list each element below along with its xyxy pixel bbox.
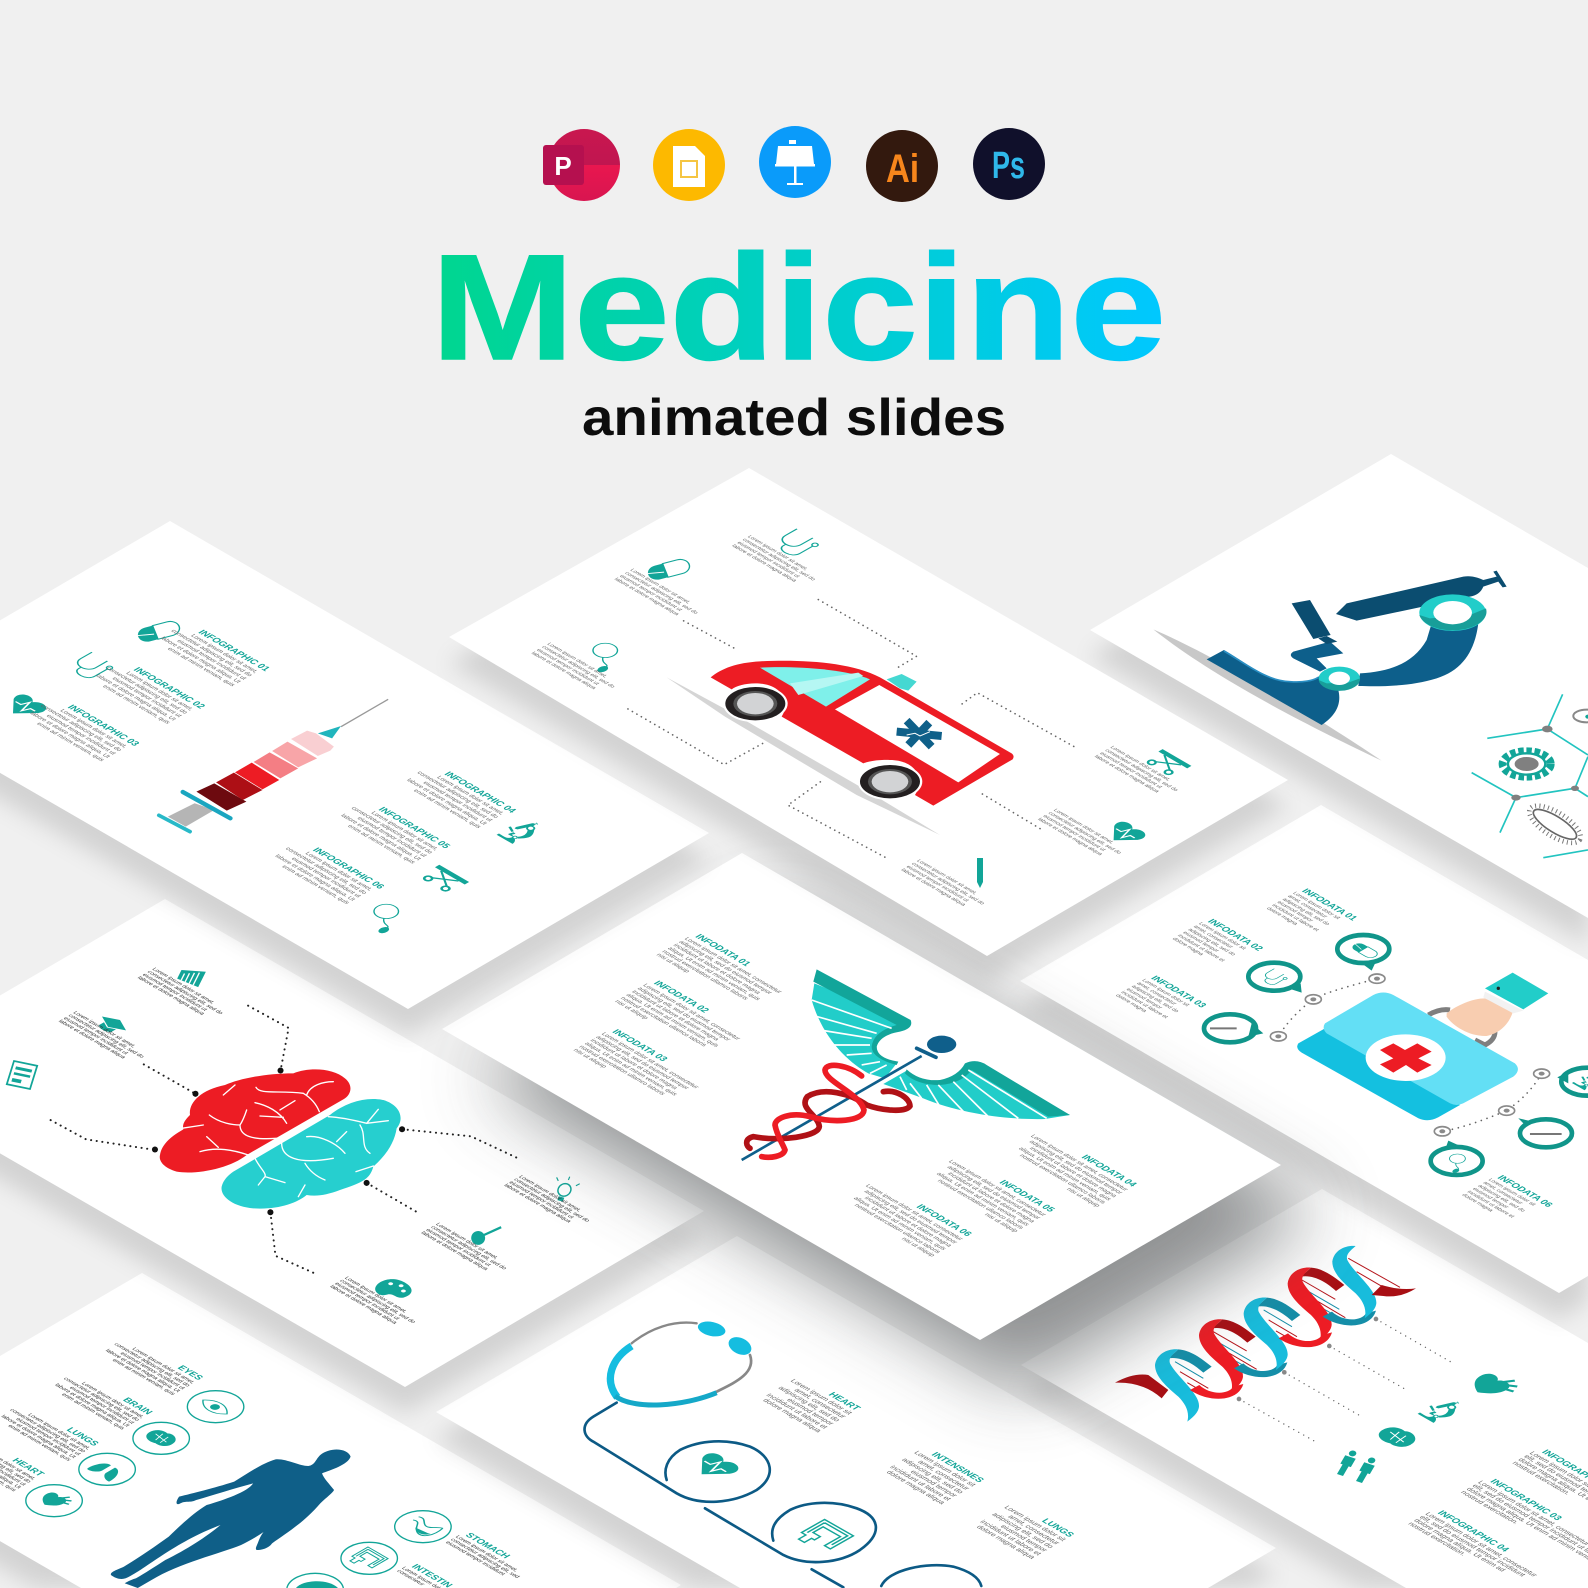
body part text <box>0 1334 535 1588</box>
stethoscope slide text: incididunt ut labore et <box>978 1519 1043 1557</box>
stethoscope slide text: Lorem ipsum dolor sit <box>1002 1505 1068 1542</box>
DNA slide text: elit, sed do eiusmod tempor incididunt <box>1417 1514 1527 1578</box>
ambulance slide text <box>529 535 1184 912</box>
DNA slide text: nostrud exercitation. <box>1459 1490 1521 1525</box>
medical bag slide text: eiusmod tempor <box>1275 900 1314 923</box>
body part text: EYES <box>175 1364 205 1381</box>
dotted nodes <box>1270 974 1550 1136</box>
syringe slide text: INFOGRAPHIC 05 <box>376 806 453 850</box>
body part text: enim ad minim veniam, quis <box>6 1424 72 1462</box>
caduceus slide text: adipiscing elit, sed do eiusmod tempor <box>945 1165 1042 1221</box>
ambulance slide text: Lorem ipsum dolor sit amet, <box>915 859 979 896</box>
ambulance slide text: eiusmod tempor incididunt ut <box>1041 814 1107 852</box>
syringe slide text: Lorem ipsum dolor sit amet, <box>124 671 194 712</box>
brain slide text: Lorem ipsum dolor sit amet, <box>71 1011 137 1049</box>
caduceus slide text: INFODATA 05 <box>997 1179 1057 1213</box>
ambulance slide text: Lorem ipsum dolor sit amet, <box>545 642 609 679</box>
caduceus slide text: incididunt ut labore et dolore magna <box>945 1171 1037 1224</box>
title: Medicine <box>431 223 1166 391</box>
syringe slide icons <box>0 619 538 934</box>
stethoscope slide text: eiusmod tempor <box>785 1397 836 1427</box>
syringe slide text: eiusmod tempor incididunt ut <box>110 677 183 718</box>
caduceus slide text: aliqua. Ut enim ad minim veniam, quis <box>583 1041 679 1097</box>
syringe slide text: INFOGRAPHIC 06 <box>310 846 387 890</box>
body part text: Lorem ipsum dolor sit amet, <box>130 1347 196 1385</box>
syringe slide text: labore et dolore magna aliqua. Ut <box>273 854 356 902</box>
body part text: labore et dolore magna aliqua. Ut <box>103 1349 181 1394</box>
panel: stethoscope slide <box>436 1236 1276 1588</box>
pin icons <box>1210 942 1588 1174</box>
body part text: consectetur <box>395 1569 426 1587</box>
caduceus slide text: adipiscing elit, sed do eiusmod tempor <box>862 1189 959 1245</box>
icon: Photoshop <box>973 128 1045 200</box>
syringe slide text: enim ad minim veniam, quis <box>411 789 482 829</box>
ambulance slide text: labore et dolore magna aliqua <box>1036 817 1104 857</box>
panel: human body slide <box>0 1273 681 1588</box>
panel: ambulance slide <box>449 468 1288 982</box>
medical bag slide text: eiusmod tempor <box>1181 931 1220 953</box>
stethoscope slide text: incididunt ut labore et <box>888 1464 953 1502</box>
brain slide text: eiusmod tempor incididunt ut <box>507 1180 575 1220</box>
caduceus slide text: nisi ut aliquip <box>983 1212 1020 1234</box>
stethoscope slide text: adipiscing elit, sed do <box>776 1385 842 1423</box>
syringe slide text: eiusmod tempor incididunt ut <box>175 639 247 681</box>
caduceus slide text: incididunt ut labore et dolore magna <box>630 989 721 1042</box>
caduceus slide text: Lorem ipsum dolor sit amet, consectetur <box>682 936 783 995</box>
stethoscope slide text: dolore magna aliqua <box>884 1469 947 1505</box>
medical bag slide text: dolore magna <box>1114 994 1149 1014</box>
stethoscope slide text: amet, consectetur <box>916 1459 972 1492</box>
ambulance slide text: consectetur adipiscing elit, sed do <box>1103 748 1179 792</box>
panel: syringe slide <box>0 521 709 1035</box>
brain <box>160 1069 401 1209</box>
brain slide text: consectetur adipiscing elit, sed do <box>429 1225 508 1271</box>
syringe slide text: Lorem ipsum dolor sit amet, <box>189 634 259 674</box>
medical bag slide text: eiusmod tempor <box>1471 1187 1510 1210</box>
DNA slide text: nostrud exercitation. <box>1510 1460 1572 1496</box>
body part text: Lorem ipsum dolor sit amet, <box>453 1535 519 1573</box>
brain slide text: labore et dolore magna aliqua <box>502 1183 573 1224</box>
ambulance slide text: labore et dolore magna aliqua <box>730 544 798 583</box>
caduceus <box>742 969 1070 1160</box>
icon: heart with gauge <box>687 1451 742 1483</box>
medical bag slide text: Lorem ipsum dolor sit <box>1197 922 1247 951</box>
body part text: eiusmod tempor incididunt ut <box>14 1417 82 1457</box>
ambulance slide text: eiusmod tempor incididunt ut <box>535 648 601 686</box>
caduceus slide text: aliqua. Ut enim ad minim veniam, quis <box>666 946 762 1002</box>
medical bag slide text: incididunt ut labore et <box>1176 934 1226 963</box>
brain slide text: consectetur adipiscing elit, sed do <box>66 1014 145 1059</box>
icon: Photoshop: Ps <box>992 145 1025 187</box>
stethoscope slide text: INTENSINES <box>929 1451 986 1484</box>
brain slide text: consectetur adipiscing elit, sed do <box>512 1178 591 1223</box>
medical bag slide text: adipiscing elit, sed do <box>1476 1184 1526 1213</box>
caduceus slide text: adipiscing elit, sed do eiusmod tempor <box>594 1035 691 1091</box>
stethoscope slide text: dolore magna aliqua <box>761 1397 823 1434</box>
brain slide text: labore et dolore magna aliqua <box>328 1285 399 1325</box>
body part text: consectetur adipiscing elit, sed <box>449 1538 520 1579</box>
brain slide text <box>56 967 596 1330</box>
syringe slide text: enim ad minim veniam, quis <box>101 684 171 725</box>
stethoscope slide text: Lorem ipsum dolor sit <box>912 1450 978 1488</box>
ambulance slide text: Lorem ipsum dolor sit amet, <box>746 535 810 572</box>
body part text: eiusmod tempor incididunt <box>444 1541 506 1577</box>
DNA dotted leaders <box>1237 1317 1453 1442</box>
DNA slide icons <box>1335 1368 1523 1484</box>
caduceus slide text: incididunt ut labore et dolore magna <box>671 943 763 996</box>
brain slide text: consectetur adipiscing elit, sed do <box>338 1279 416 1324</box>
DNA slide text: INFOGRAPHIC 04 <box>1435 1509 1512 1553</box>
icon: PowerPoint: P <box>554 151 572 181</box>
speech bubble pins <box>1204 935 1588 1175</box>
body part text: HEART <box>10 1457 47 1478</box>
medical bag slide text: INFODATA 01 <box>1300 887 1360 922</box>
panel: DNA slide <box>1021 1189 1588 1588</box>
caduceus slide text: nostrud exercitation ullamco laboris <box>935 1179 1025 1230</box>
syringe slide text: eiusmod tempor incididunt ut <box>44 714 117 756</box>
body part text: STOMACH <box>463 1531 513 1560</box>
caduceus slide text: incididunt ut labore et dolore magna <box>1028 1146 1119 1199</box>
caduceus slide text: nostrud exercitation ullamco laboris <box>619 996 708 1048</box>
DNA slide text: nostrud exercitation. <box>1406 1521 1468 1557</box>
body part text: consectetur adipiscing elit, sed do <box>8 1408 87 1454</box>
brain slide text: eiusmod tempor incididunt ut <box>424 1228 492 1267</box>
brain slide text: eiusmod tempor incididunt ut <box>61 1016 130 1056</box>
body part text: LUNGS <box>64 1426 101 1447</box>
organ icons <box>36 1397 443 1588</box>
caduceus slide text: aliqua. Ut enim ad minim veniam, quis <box>852 1196 948 1251</box>
DNA slide text: dolore magna aliqua. Ut enim ad <box>1412 1518 1507 1573</box>
body part text: labore et dolore magna aliqua. Ut <box>0 1414 77 1459</box>
body part text: consectetur adipiscing elit, sed do <box>62 1377 140 1422</box>
medical bag slide text: Lorem ipsum dolor sit <box>1486 1178 1537 1207</box>
syringe slide text: labore et dolore magna aliqua. Ut <box>339 814 422 862</box>
panel: medical bag slide <box>1020 805 1588 1319</box>
panel: brain slide <box>0 899 704 1413</box>
syringe slide text: Lorem ipsum dolor sit amet, <box>435 776 505 816</box>
ambulance slide text: consectetur adipiscing elit, sed do <box>1046 811 1122 855</box>
caduceus slide text: adipiscing elit, sed do eiusmod tempor <box>677 940 774 995</box>
brain slide text: labore et dolore magna aliqua <box>135 976 206 1017</box>
panel: caduceus slide <box>442 853 1321 1390</box>
icon: Google Slides <box>653 129 725 201</box>
medical bag slide text: INFODATA 02 <box>1205 918 1265 952</box>
brain slide text: labore et dolore magna aliqua <box>419 1231 490 1272</box>
stethoscope slide text: adipiscing elit, sed do <box>990 1512 1055 1550</box>
medical bag slide text: amet, consectetur <box>1481 1181 1524 1206</box>
brain slide text: eiusmod tempor incididunt ut <box>333 1282 401 1321</box>
medical bag slide text: adipiscing elit, sed do <box>1280 897 1331 926</box>
brain slide text: Lorem ipsum dolor sit amet, <box>434 1222 500 1261</box>
ambulance slide text: consectetur adipiscing elit, sed do <box>623 571 699 615</box>
caduceus slide text: Lorem ipsum dolor sit amet, consectetur <box>1029 1134 1130 1192</box>
ambulance slide text: labore et dolore magna aliqua <box>529 651 598 691</box>
medical bag slide text: amet, consectetur <box>1135 981 1178 1006</box>
syringe slide text: consectetur adipiscing elit, sed do <box>283 847 368 896</box>
caduceus slide text: nostrud exercitation ullamco laboris <box>852 1203 942 1255</box>
ambulance <box>667 661 1014 835</box>
ambulance slide text: labore et dolore magna aliqua <box>612 577 681 617</box>
medical bag slide text: dolore magna <box>1460 1193 1495 1213</box>
medical bag slide text: Lorem ipsum dolor sit <box>1140 978 1191 1008</box>
caduceus slide text: nisi ut aliquip <box>900 1237 937 1258</box>
syringe slide text: Lorem ipsum dolor sit amet, <box>369 811 439 852</box>
DNA slide text: INFOGRAPHIC 03 <box>1488 1478 1564 1522</box>
body part text: Lorem ipsum dolor sit amet, <box>80 1381 146 1420</box>
syringe slide text: labore et dolore magna aliqua. Ut <box>405 778 488 826</box>
ambulance slide text: eiusmod tempor incididunt ut <box>1098 751 1164 790</box>
human silhouette <box>111 1450 351 1588</box>
caduceus slide text: nostrud exercitation ullamco laboris <box>1017 1153 1107 1205</box>
body part text: eiusmod tempor incididunt ut <box>118 1351 186 1391</box>
caduceus slide text: adipiscing elit, sed do eiusmod tempor <box>1027 1139 1124 1195</box>
icon: PowerPoint <box>543 129 620 201</box>
caduceus slide text: nisi ut aliquip <box>613 999 650 1021</box>
medical bag slide text: incididunt ut labore et <box>1465 1190 1516 1219</box>
caduceus slide text: incididunt ut labore et dolore magna <box>862 1196 954 1248</box>
caduceus slide text: aliqua. Ut enim ad minim veniam, quis <box>624 993 720 1048</box>
caduceus slide text: aliqua. Ut enim ad minim veniam, quis <box>1017 1146 1113 1202</box>
stethoscope slide text: eiusmod tempor <box>908 1469 960 1499</box>
stethoscope slide text: incididunt ut labore et <box>764 1392 829 1430</box>
syringe slide text: enim ad minim veniam, quis <box>280 865 350 905</box>
syringe slide text: labore et dolore magna aliqua. Ut <box>28 711 111 759</box>
body part text: Lorem ipsum dolor sit amet, <box>26 1413 92 1451</box>
medical bag slide text: amet, consectetur <box>1286 894 1329 919</box>
ambulance slide text: Lorem ipsum dolor sit amet, <box>1052 808 1115 845</box>
ambulance slide text: eiusmod tempor incididunt ut <box>618 574 684 612</box>
medical bag with hand <box>1297 973 1548 1120</box>
brain slide text: Lorem ipsum dolor sit amet, <box>343 1276 409 1314</box>
syringe slide text <box>21 620 519 907</box>
syringe slide text: INFOGRAPHIC 04 <box>442 770 519 815</box>
icon: Illustrator <box>866 130 938 202</box>
caduceus slide text <box>571 931 1140 1258</box>
brain slide text: consectetur adipiscing elit, sed do <box>145 970 224 1016</box>
caduceus slide text: Lorem ipsum dolor sit amet, consectetur <box>641 983 742 1041</box>
icon: intestine <box>794 1519 853 1553</box>
syringe slide text: consectetur adipiscing elit, sed do <box>349 806 434 855</box>
syringe slide text: INFOGRAPHIC 01 <box>196 628 272 672</box>
DNA helix <box>1115 1246 1416 1422</box>
ambulance slide text: consectetur adipiscing elit, sed do <box>540 645 616 689</box>
stethoscope slide text: amet, consectetur <box>792 1387 848 1420</box>
medical bag slide text: INFODATA 03 <box>1149 974 1209 1009</box>
stethoscope slide text: eiusmod tempor <box>998 1524 1050 1553</box>
stethoscope slide text: LUNGS <box>1040 1517 1076 1538</box>
organ icon circles <box>26 1391 451 1588</box>
syringe slide text: labore et dolore magna aliqua. Ut <box>94 674 177 722</box>
caduceus slide text: aliqua. Ut enim ad minim veniam, quis <box>935 1172 1031 1227</box>
icon: Keynote <box>759 126 831 198</box>
syringe slide text: Lorem ipsum dolor sit amet, <box>58 709 128 749</box>
syringe slide text: consectetur adipiscing elit, sed do <box>415 771 500 820</box>
caduceus slide text: INFODATA 03 <box>610 1028 670 1063</box>
body part text: enim ad minim veniam, quis <box>110 1358 176 1396</box>
caduceus slide text: Lorem ipsum dolor sit amet, consectetur <box>947 1159 1048 1217</box>
ambulance slide text: labore et dolore magna aliqua <box>899 868 968 908</box>
stethoscope slide text: adipiscing elit, sed do <box>900 1457 965 1495</box>
stethoscope slide text <box>758 1373 1077 1560</box>
syringe slide text: Lorem ipsum dolor sit amet, <box>303 852 374 892</box>
brain slide text: Lorem ipsum dolor sit amet, <box>517 1175 583 1213</box>
syringe slide text: INFOGRAPHIC 03 <box>65 703 142 747</box>
brain slide text: Lorem ipsum dolor sit amet, <box>150 967 216 1005</box>
ambulance slide text: labore et dolore magna aliqua <box>1092 755 1161 794</box>
medical bag slide text: adipiscing elit, sed do <box>1129 984 1180 1013</box>
medical bag slide text: amet, consectetur <box>1191 925 1234 949</box>
brain dotted leaders <box>51 1006 517 1273</box>
DNA slide text: Lorem ipsum dolor sit amet, consectetur <box>1423 1511 1540 1578</box>
caduceus slide text: INFODATA 02 <box>651 979 711 1014</box>
body part text: BRAIN <box>121 1396 155 1416</box>
ambulance slide text: consectetur adipiscing elit, sed do <box>910 862 986 906</box>
caduceus slide text: nisi ut aliquip <box>654 953 692 974</box>
syringe <box>159 699 388 832</box>
syringe slide text: eiusmod tempor incididunt ut <box>421 781 494 823</box>
medical bag slide text: eiusmod tempor <box>1124 987 1163 1010</box>
brain slide icons <box>7 963 581 1303</box>
icon: Illustrator: Ai <box>886 147 919 191</box>
dotted leaders <box>628 600 1076 858</box>
caduceus slide text: incididunt ut labore et dolore magna <box>588 1038 680 1091</box>
caduceus slide text: INFODATA 04 <box>1079 1153 1140 1188</box>
medical bag slide text: adipiscing elit, sed do <box>1186 928 1237 957</box>
stethoscope slide text: HEART <box>826 1391 863 1412</box>
stethoscope slide text: amet, consectetur <box>1006 1514 1062 1546</box>
app icons row <box>543 126 1045 202</box>
ambulance slide text: consectetur adipiscing elit, sed do <box>740 538 817 582</box>
medical bag slide text: incididunt ut labore et <box>1270 903 1320 933</box>
body part text: eiusmod tempor incididunt ut <box>68 1386 136 1425</box>
microscope <box>1153 571 1507 761</box>
caduceus slide text: nisi ut aliquip <box>1065 1187 1102 1208</box>
syringe slide text: consectetur adipiscing elit, sed do <box>38 704 123 753</box>
cell network <box>1472 694 1588 858</box>
subtitle: animated slides <box>582 389 1006 447</box>
syringe slide text: enim ad minim veniam, quis <box>35 722 105 762</box>
ambulance slide text: eiusmod tempor incididunt ut <box>904 865 970 903</box>
syringe slide text: eiusmod tempor incididunt ut <box>289 857 362 899</box>
medical bag slide text: dolore magna <box>1265 906 1299 927</box>
caduceus slide text: nostrud exercitation ullamco laboris <box>660 949 750 1001</box>
stethoscope <box>585 1319 981 1587</box>
caduceus slide text: adipiscing elit, sed do eiusmod tempor <box>635 986 732 1042</box>
syringe slide text: consectetur adipiscing elit, sed do <box>104 666 189 715</box>
body part text: enim ad minim veniam, quis <box>60 1393 126 1431</box>
stethoscope slide text: dolore magna aliqua <box>974 1524 1037 1560</box>
body part text: labore et dolore magna aliqua. Ut <box>53 1383 131 1428</box>
medical bag slide text: incididunt ut labore et <box>1119 991 1169 1020</box>
caduceus slide text: Lorem ipsum dolor sit amet, consectetur <box>599 1032 700 1090</box>
medical bag slide text: INFODATA 06 <box>1495 1174 1555 1208</box>
syringe slide text: eiusmod tempor incididunt ut <box>355 816 428 858</box>
ambulance slide text: Lorem ipsum dolor sit amet, <box>1108 745 1172 782</box>
ambulance slide icons <box>575 529 1191 888</box>
ambulance slide text: eiusmod tempor incididunt ut <box>735 541 801 579</box>
caduceus slide text: Lorem ipsum dolor sit amet, consectetur <box>864 1183 964 1242</box>
syringe slide text: enim ad minim veniam, quis <box>346 824 416 865</box>
ambulance slide text: Lorem ipsum dolor sit amet, <box>628 568 692 605</box>
caduceus slide text: nisi ut aliquip <box>571 1048 609 1069</box>
caduceus slide text: INFODATA 01 <box>693 933 753 967</box>
brain slide text: eiusmod tempor incididunt ut <box>140 973 209 1012</box>
syringe slide text: INFOGRAPHIC 02 <box>131 666 207 710</box>
syringe slide text: labore et dolore magna aliqua. Ut <box>159 636 242 684</box>
medical bag slide text <box>1114 886 1555 1227</box>
medical bag slide text: dolore magna <box>1170 937 1205 957</box>
caduceus slide text: INFODATA 06 <box>914 1203 974 1238</box>
stethoscope slide text: Lorem ipsum dolor sit <box>788 1378 854 1416</box>
brain slide text: labore et dolore magna aliqua <box>56 1019 127 1060</box>
syringe slide text: enim ad minim veniam, quis <box>165 647 236 688</box>
syringe slide text: consectetur adipiscing elit, sed do <box>169 629 254 678</box>
DNA slide text <box>1406 1445 1588 1588</box>
medical bag slide text: Lorem ipsum dolor sit <box>1291 891 1342 921</box>
panel: microscope slide <box>1090 454 1588 944</box>
caduceus slide text: nostrud exercitation ullamco laboris <box>577 1044 667 1096</box>
body part text: consectetur adipiscing elit, sed do <box>112 1342 191 1388</box>
